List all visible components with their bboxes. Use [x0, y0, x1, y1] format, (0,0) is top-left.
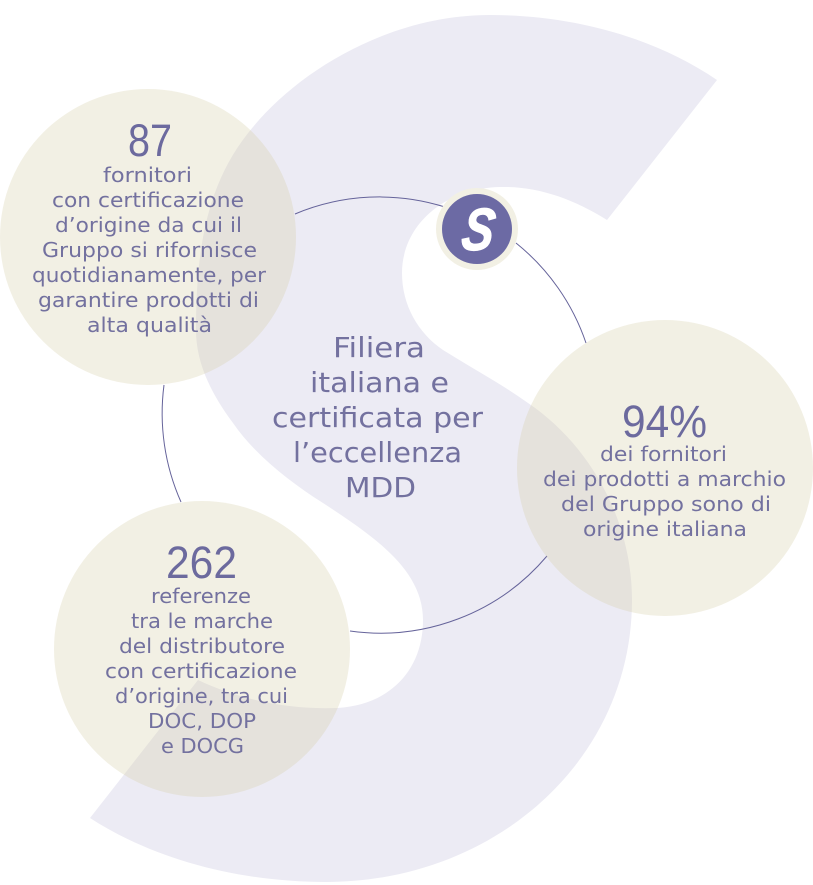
panel: 94% Italian suppliers: 94% [622, 396, 707, 447]
panel: 94% Italian suppliers: origine italiana [583, 517, 747, 541]
panel: 94% Italian suppliers: dei prodotti a marchio [543, 467, 786, 491]
icon: S logo badge: S [458, 195, 500, 263]
panel: 94% Italian suppliers [517, 320, 813, 616]
panel: 87 suppliers: alta qualità [87, 313, 212, 337]
panel: 87 suppliers: garantire prodotti di [38, 288, 259, 312]
panel: 262 references: 262 [166, 537, 237, 588]
panel: 87 suppliers: fornitori [103, 163, 192, 187]
panel: 87 suppliers: Gruppo si rifornisce [42, 238, 257, 262]
icon: S logo badge [436, 188, 518, 270]
panel: 262 references [54, 501, 350, 797]
panel: 94% Italian suppliers: del Gruppo sono di [561, 492, 771, 516]
central heading [272, 331, 484, 504]
central heading: Filiera [333, 331, 425, 364]
central heading: l’eccellenza [293, 436, 462, 469]
central heading: italiana e [310, 366, 449, 399]
panel: 87 suppliers: quotidianamente, per [32, 263, 267, 287]
panel: 262 references: e DOCG [161, 734, 244, 758]
panel: 262 references: con certificazione [105, 659, 297, 683]
panel: 262 references: d’origine, tra cui [115, 684, 288, 708]
panel: 87 suppliers [0, 89, 296, 385]
central heading: certificata per [272, 401, 484, 434]
panel: 87 suppliers: d’origine da cui il [55, 213, 242, 237]
panel: 87 suppliers: 87 [128, 115, 172, 166]
panel: 94% Italian suppliers: dei fornitori [600, 442, 727, 466]
panel: 87 suppliers: con certificazione [52, 188, 244, 212]
central heading: MDD [345, 471, 416, 504]
panel: 262 references: del distributore [119, 634, 285, 658]
background S shape [90, 15, 717, 882]
panel: 262 references: tra le marche [131, 609, 273, 633]
connecting ring [162, 197, 586, 633]
panel: 262 references: DOC, DOP [148, 709, 256, 733]
panel: 262 references: referenze [151, 584, 251, 608]
